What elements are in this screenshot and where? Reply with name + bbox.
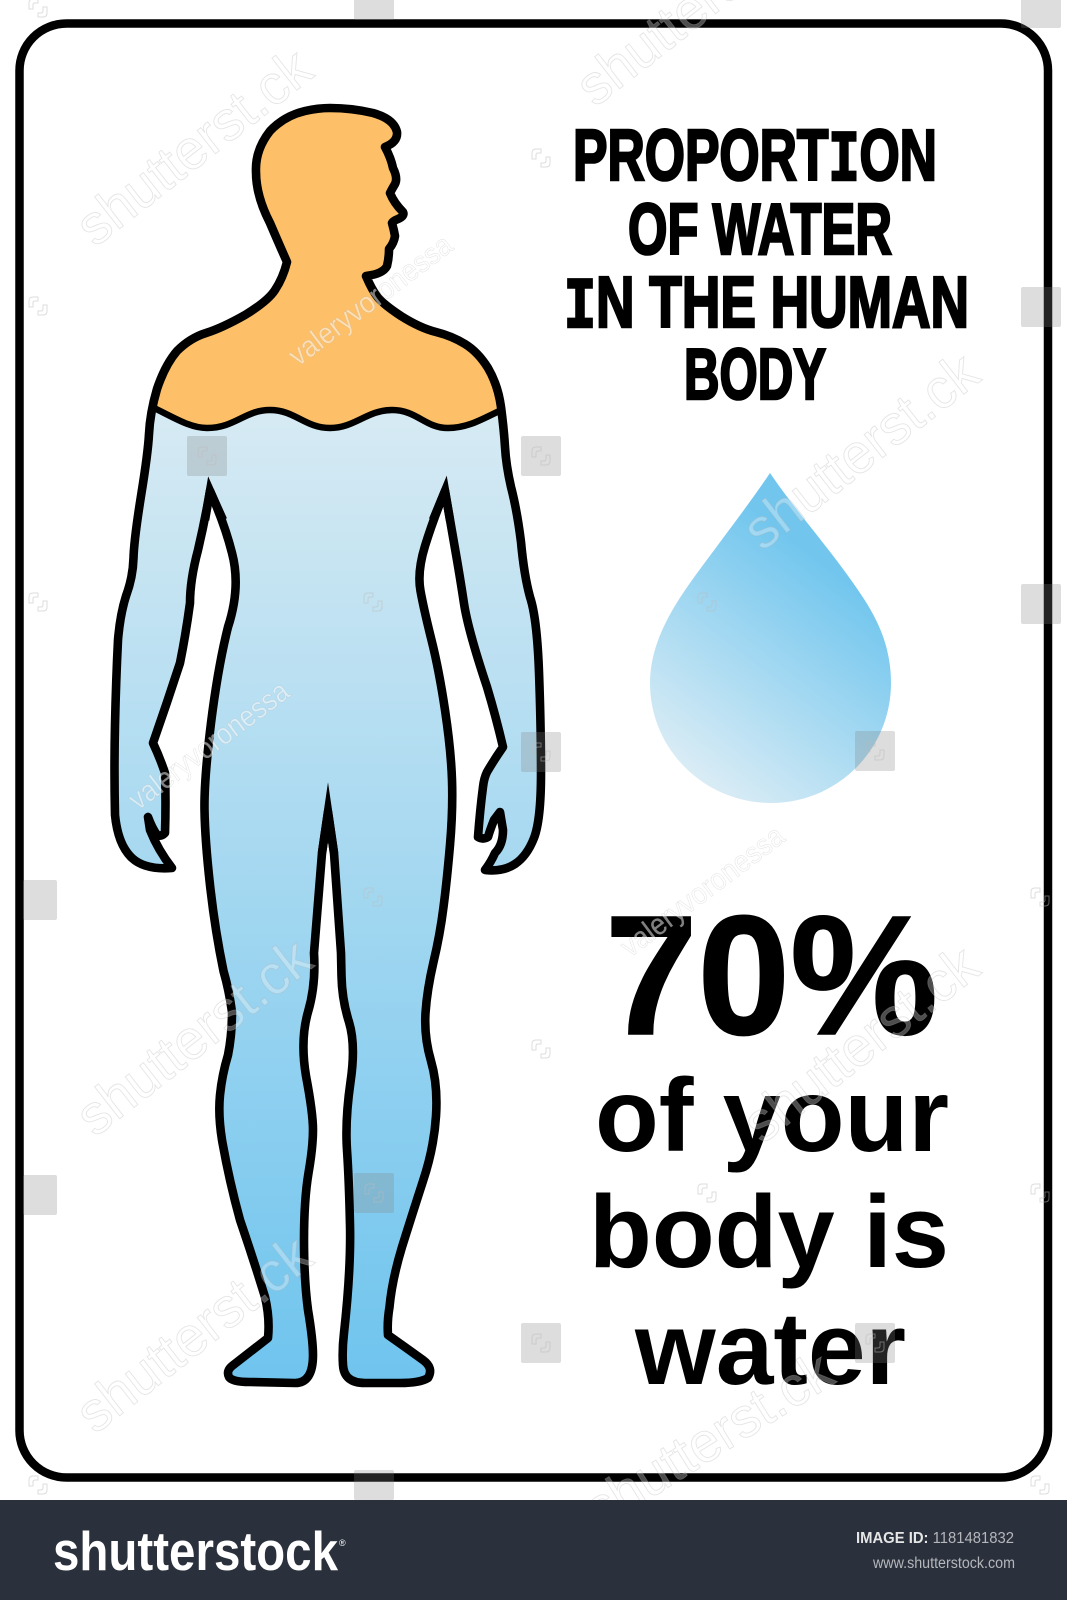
- watermark overlay: shutterst.ck: [64, 925, 324, 1147]
- title line 4: BODY: [684, 335, 826, 415]
- footer background: [0, 1500, 1067, 1600]
- footer logo: shutterstock: [53, 1520, 338, 1582]
- head and shoulders non-water area: [157, 112, 497, 425]
- watermark overlay: valeryvoronessa: [614, 819, 791, 964]
- watermark overlay: shutterst.ck: [731, 932, 991, 1154]
- watermark overlay: shutterst.ck: [731, 339, 991, 561]
- image id: IMAGE ID: 1181481832: [856, 1530, 1014, 1547]
- statistic: [589, 881, 949, 1406]
- caption line 1: of your: [595, 1058, 949, 1174]
- watermark overlay: shutterst.ck: [64, 1222, 324, 1444]
- footer bar: [0, 1500, 1067, 1600]
- website: www.shutterstock.com: [872, 1555, 1015, 1572]
- watermark overlay: valeryvoronessa: [282, 228, 459, 373]
- title line 2: OF WATER: [628, 190, 892, 270]
- title line 1: PROPORTION: [573, 116, 937, 202]
- 70 percent: 70%: [605, 881, 938, 1071]
- caption line 3: water: [634, 1291, 906, 1406]
- registered mark: ®: [339, 1538, 346, 1548]
- watermark overlay: shutterst.ck: [64, 35, 324, 257]
- caption line 2: body is: [589, 1174, 949, 1289]
- icon: water drop: [650, 473, 891, 803]
- body water fill: [114, 108, 541, 1383]
- body outline: [114, 108, 541, 1383]
- human body figure: [100, 90, 541, 1383]
- watermark overlay: shutterst.ck: [573, 1338, 845, 1540]
- water level wave: [150, 406, 506, 428]
- title: [564, 116, 969, 415]
- watermark overlay: valeryvoronessa: [122, 675, 296, 817]
- sharp armpit and crotch tips: [205, 491, 450, 853]
